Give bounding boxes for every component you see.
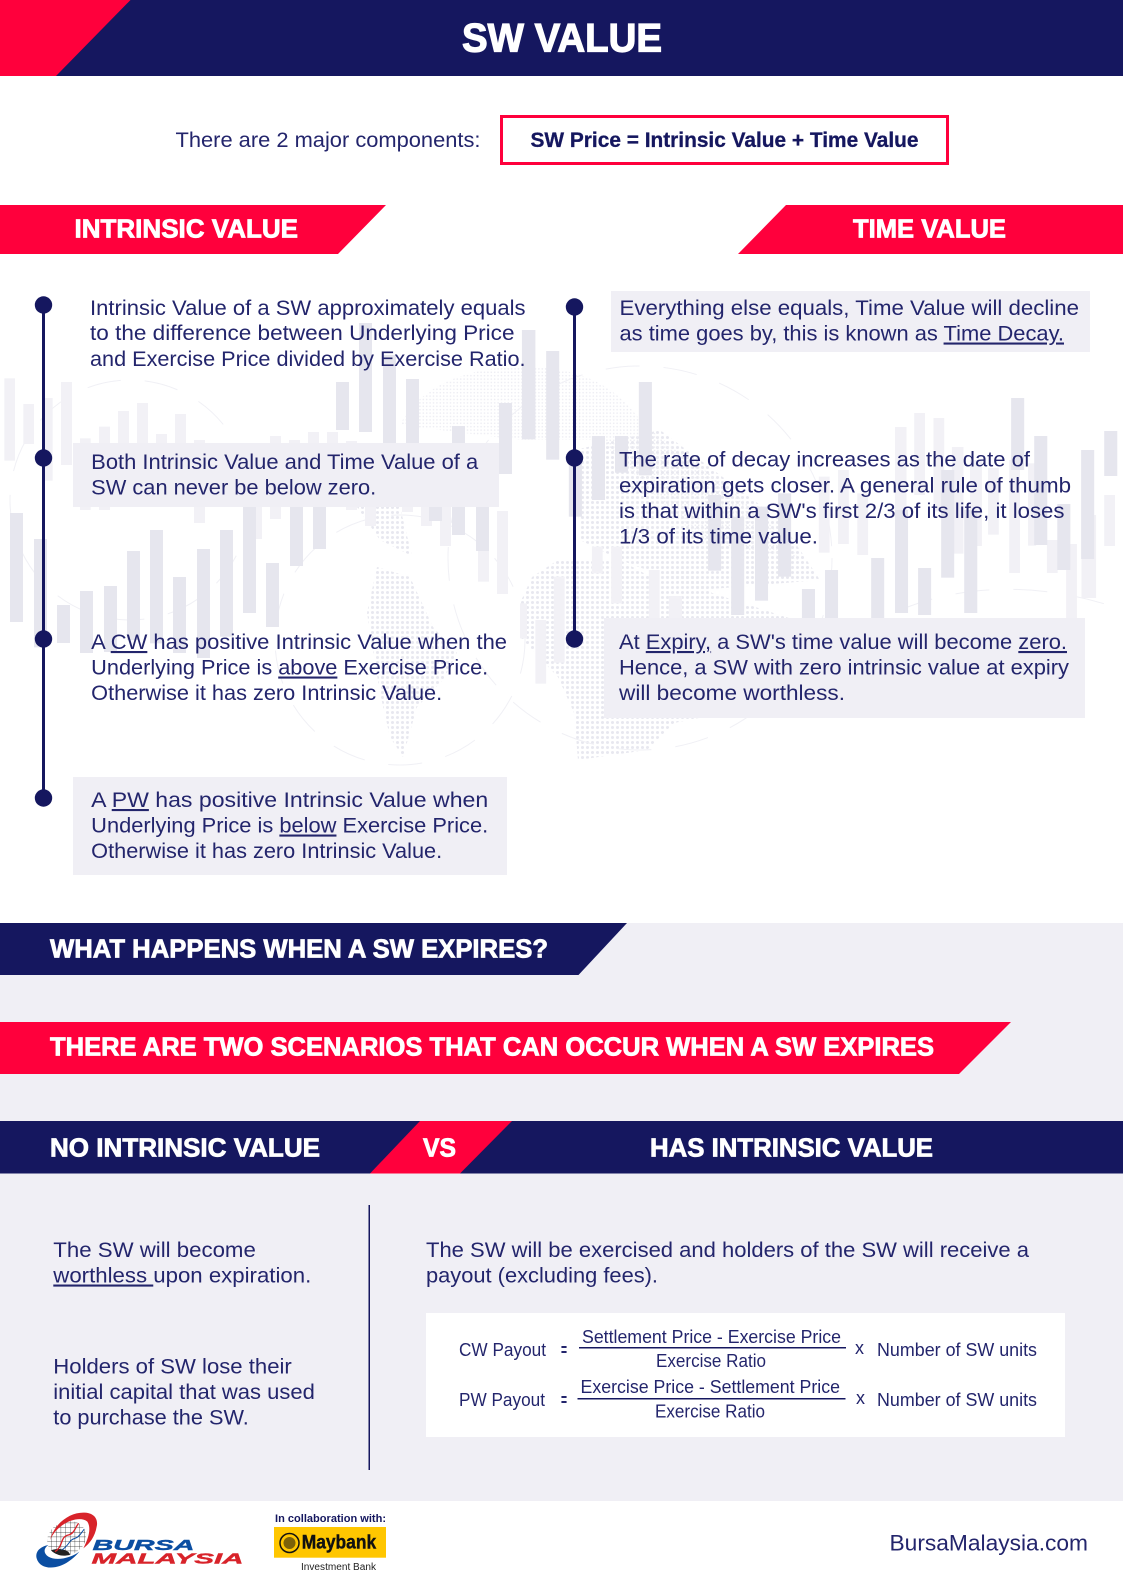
- text: call warrant: [91, 631, 507, 705]
- panel: time value timeline: [566, 291, 1090, 718]
- text: worthless upon expiration: The SW will become: [53, 1239, 256, 1262]
- text: rate of decay: [619, 449, 1071, 548]
- title banner: [0, 0, 1123, 76]
- heading: two scenarios: [0, 1022, 1011, 1074]
- formula: PW payout: x: [856, 1388, 865, 1408]
- text: never below zero: SW can never be below zero.: [91, 477, 376, 500]
- text: exercised with payout: [426, 1239, 1029, 1288]
- text: rate of decay: expiration gets closer. A general rule of thumb: [619, 474, 1071, 498]
- text: rate of decay: The rate of decay increases as the date of: [619, 449, 1030, 472]
- heading: two scenarios: THERE ARE TWO SCENARIOS THAT CAN OCCUR WHEN A SW EXPIRES: [50, 1032, 934, 1062]
- formula intro: [176, 116, 948, 164]
- heading: no intrinsic value vs has intrinsic value: VS: [423, 1132, 456, 1162]
- formula: PW payout: Exercise Price - Settlement Price: [580, 1377, 840, 1397]
- timeline: time value: [566, 298, 583, 648]
- text: lose initial capital: initial capital that was used: [53, 1381, 315, 1404]
- text: exercised with payout: payout (excluding fees).: [426, 1264, 658, 1288]
- text: lose initial capital: to purchase the SW.: [53, 1406, 249, 1430]
- formula: CW payout: x: [855, 1338, 864, 1358]
- logo: Maybank collaboration: [274, 1513, 386, 1573]
- formula: CW payout: =: [561, 1340, 567, 1360]
- background: world map and chart bars: [4, 323, 1123, 765]
- formula box: SW Price = Intrinsic Value + Time Value: [530, 129, 918, 152]
- text: never below zero: [73, 443, 499, 507]
- formula panel: [426, 1313, 1065, 1437]
- formula: PW payout: PW Payout: [459, 1390, 545, 1410]
- formula: CW payout: Settlement Price - Exercise Price: [582, 1327, 841, 1347]
- timeline: intrinsic value: [35, 296, 52, 807]
- text: lose initial capital: Holders of SW lose their: [53, 1356, 292, 1378]
- text: call warrant: Underlying Price is above Exercise Price.: [91, 656, 488, 680]
- heading: no intrinsic value vs has intrinsic value: [0, 1121, 1123, 1174]
- panel: intrinsic value timeline: [35, 296, 526, 875]
- title: SW VALUE: [462, 16, 662, 60]
- footer: [36, 1513, 1088, 1573]
- logo: Maybank collaboration: Maybank: [302, 1532, 377, 1554]
- heading: time value: TIME VALUE: [853, 214, 1006, 244]
- text: time decay: as time goes by, this is known as Time Decay.: [620, 322, 1064, 346]
- text: rate of decay: 1/3 of its time value.: [619, 526, 818, 548]
- text: put warrant: A PW has positive Intrinsic Value when: [91, 789, 488, 812]
- formula: PW payout: =: [561, 1390, 567, 1410]
- logo: Bursa Malaysia: BURSA: [92, 1537, 194, 1554]
- heading: time value: [738, 205, 1123, 254]
- text: never below zero: Both Intrinsic Value and Time Value of a: [91, 451, 479, 474]
- heading: no intrinsic value vs has intrinsic value: NO INTRINSIC VALUE: [50, 1132, 320, 1162]
- intro text: There are 2 major components:: [176, 129, 480, 152]
- heading: what happens: WHAT HAPPENS WHEN A SW EXPIRES?: [50, 934, 548, 964]
- text: at expiry: Hence, a SW with zero intrinsic value at expiry: [619, 656, 1070, 680]
- text: lose initial capital: [53, 1356, 315, 1430]
- text: call warrant: Otherwise it has zero Intrinsic Value.: [91, 682, 442, 705]
- formula: PW payout: Number of SW units: [877, 1390, 1037, 1410]
- text: at expiry: At Expiry, a SW's time value will become zero.: [619, 631, 1067, 654]
- text: rate of decay: is that within a SW's first 2/3 of its life, it loses: [619, 500, 1064, 523]
- formula: CW payout: Number of SW units: [877, 1340, 1037, 1360]
- text: call warrant: A CW has positive Intrinsic Value when the: [91, 631, 507, 654]
- panel: what happens when a SW expires: [0, 923, 1123, 1501]
- formula: CW payout: Exercise Ratio: [656, 1351, 766, 1371]
- text: intrinsic value definition: to the difference between Underlying Price: [90, 322, 514, 345]
- text: time decay: Everything else equals, Time Value will decline: [620, 297, 1079, 320]
- text: worthless upon expiration: worthless upon expiration.: [52, 1264, 311, 1288]
- text: at expiry: will become worthless.: [618, 682, 845, 705]
- text: put warrant: Underlying Price is below Exercise Price.: [91, 814, 488, 838]
- formula: PW payout: Exercise Ratio: [655, 1402, 765, 1422]
- text: exercised with payout: The SW will be exercised and holders of the SW will receive a: [426, 1239, 1029, 1262]
- website: BursaMalaysia.com: [890, 1530, 1088, 1556]
- text: put warrant: Otherwise it has zero Intrinsic Value.: [91, 840, 442, 863]
- formula: PW payout: [459, 1377, 1037, 1422]
- logo: Maybank collaboration: In collaboration with:: [275, 1513, 386, 1525]
- formula: CW payout: [459, 1327, 1037, 1371]
- text: worthless upon expiration: [52, 1239, 311, 1288]
- divider: [368, 1205, 370, 1470]
- heading: no intrinsic value vs has intrinsic value: HAS INTRINSIC VALUE: [650, 1132, 933, 1162]
- heading: intrinsic value: [0, 205, 386, 254]
- text: put warrant: [73, 777, 507, 875]
- text: time decay: [611, 291, 1090, 352]
- text: intrinsic value definition: Intrinsic Value of a SW approximately equals: [90, 297, 526, 320]
- logo: Maybank collaboration: Investment Bank: [301, 1562, 377, 1573]
- logo: Bursa Malaysia: [36, 1513, 244, 1568]
- formula: CW payout: CW Payout: [459, 1340, 546, 1360]
- text: intrinsic value definition: and Exercise Price divided by Exercise Ratio.: [90, 348, 526, 371]
- text: at expiry: [604, 618, 1085, 718]
- heading: what happens: [0, 923, 627, 975]
- formula box: [502, 116, 948, 164]
- logo: Bursa Malaysia: MALAYSIA: [92, 1550, 244, 1568]
- text: intrinsic value definition: [90, 297, 526, 371]
- heading: intrinsic value: INTRINSIC VALUE: [74, 214, 298, 244]
